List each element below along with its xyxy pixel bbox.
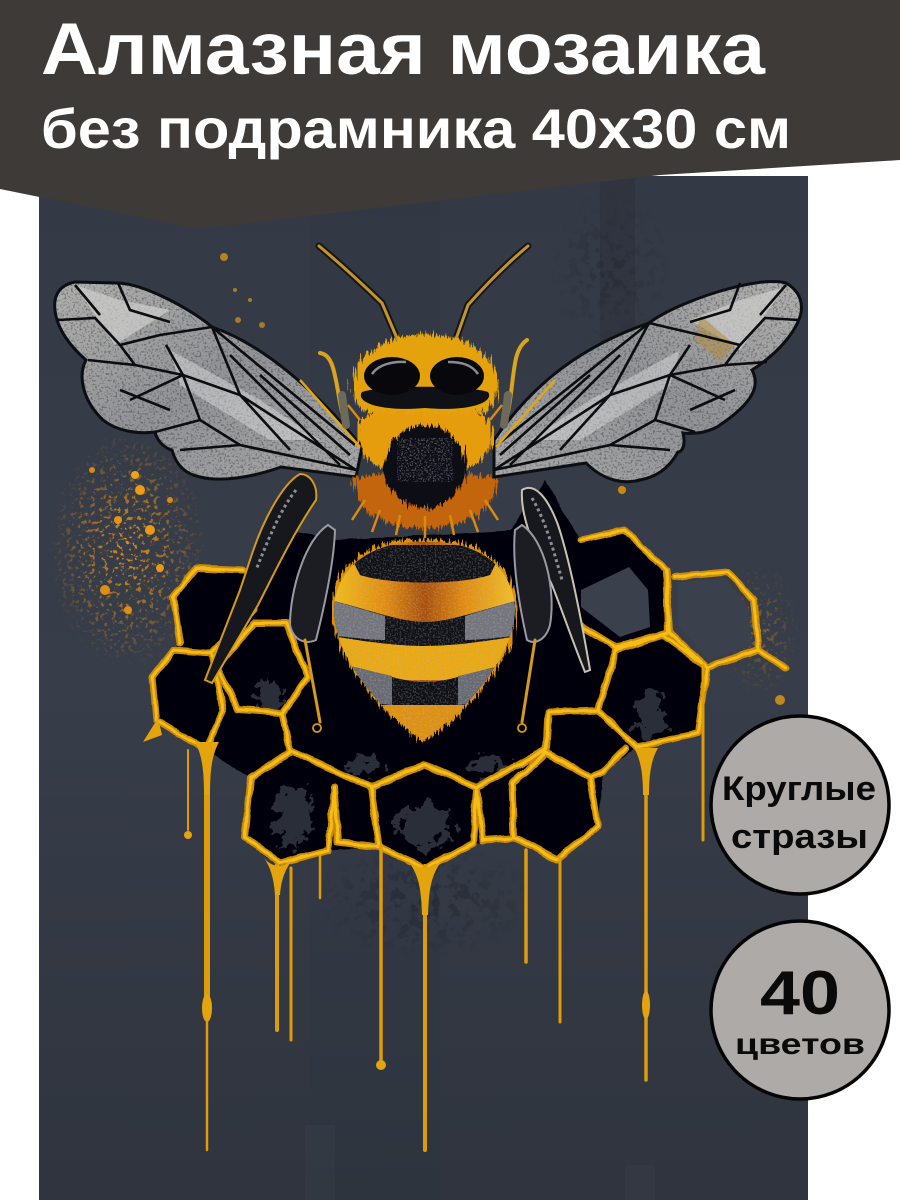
drip tips and droplets [143,718,658,1070]
head [352,334,498,412]
right wing [490,275,810,485]
badge: round rhinestones: Круглые [722,770,876,808]
badge: round rhinestones [711,716,889,894]
legs [205,474,590,732]
outer right leg [522,488,590,672]
lower leg barbs and hooks [305,640,535,732]
badge: 40 colours: цветов [735,1028,865,1061]
antennae [319,246,528,357]
honeycomb black backing [152,480,707,868]
honey drips [188,665,703,1150]
honeycomb [143,480,785,1150]
thorax fur [348,382,502,538]
eyes [364,357,420,395]
outer left leg [205,474,316,683]
thorax hair strands [348,382,502,538]
gold paint splatter [48,253,805,705]
abdomen [330,540,520,745]
open cells showing background [581,567,752,660]
badge: 40 colours: 40 [760,959,840,1028]
right wing veins [494,283,798,470]
title: Алмазная мозаика [41,9,767,90]
painting background [39,176,808,1200]
badge: round rhinestones: стразы [731,818,868,856]
inner right leg [514,525,552,642]
gold cell outlines [152,530,785,868]
left wing [50,275,370,485]
header banner [0,0,900,229]
inner left leg [290,525,335,642]
forelegs raised near head [320,340,527,425]
bee body [330,334,520,745]
badge: 40 colours [711,921,889,1099]
grey mottling inside cells [256,681,664,847]
left wing veins [58,283,356,470]
subtitle: без подрамника 40х30 см [41,97,791,160]
leg speckle highlights [256,490,562,580]
